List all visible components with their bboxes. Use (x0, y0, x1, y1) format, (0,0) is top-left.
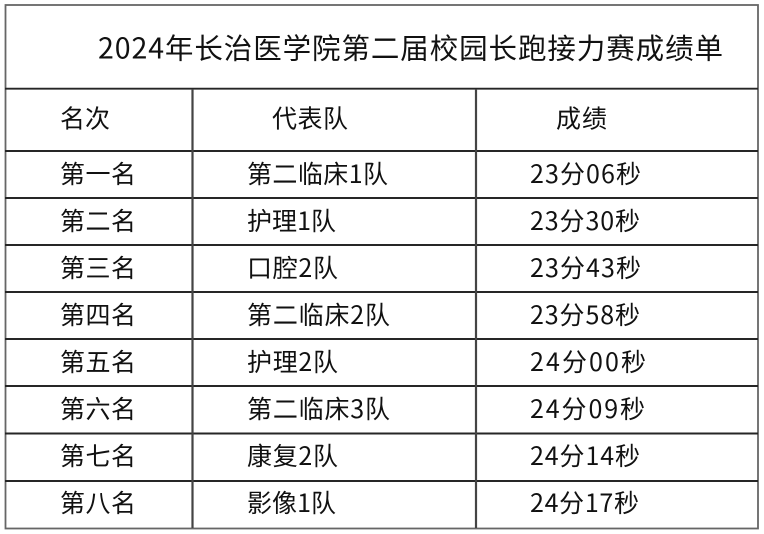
row: sixth place: 第二临床3队 (247, 390, 390, 426)
row: seventh place: 康复2队 (247, 437, 338, 473)
header row: 成绩 (556, 100, 607, 136)
row: second place: 23分30秒 (530, 202, 640, 238)
row: third place: 第三名 (60, 249, 136, 285)
row: third place: 23分43秒 (530, 249, 641, 285)
row: fourth place (60, 296, 640, 332)
row: third place: 口腔2队 (247, 249, 338, 285)
row: eighth place (60, 484, 639, 520)
row: fifth place: 24分00秒 (530, 343, 646, 379)
header row (60, 100, 607, 136)
row: sixth place: 第六名 (60, 390, 136, 426)
row: eighth place: 第八名 (60, 484, 136, 520)
row: third place (60, 249, 641, 285)
row: fifth place: 第五名 (60, 343, 136, 379)
row: first place: 第一名 (60, 155, 136, 191)
row: first place: 第二临床1队 (247, 155, 388, 191)
row: fourth place: 第二临床2队 (247, 296, 390, 332)
row: first place: 23分06秒 (530, 155, 641, 191)
header row: 名次 (60, 100, 110, 136)
row: eighth place: 24分17秒 (530, 484, 639, 520)
row: seventh place: 24分14秒 (530, 437, 640, 473)
row: seventh place (60, 437, 640, 473)
row: fourth place: 第四名 (60, 296, 136, 332)
row: sixth place (60, 390, 645, 426)
row: second place: 护理1队 (247, 202, 336, 238)
title: 2024年长治医学院第二届校园长跑接力赛成绩单 (98, 26, 723, 68)
row: sixth place: 24分09秒 (530, 390, 645, 426)
row: fifth place: 护理2队 (247, 343, 338, 379)
row: fifth place (60, 343, 646, 379)
row: second place (60, 202, 640, 238)
header row: 代表队 (272, 100, 348, 136)
row: second place: 第二名 (60, 202, 136, 238)
row: fourth place: 23分58秒 (530, 296, 640, 332)
row: first place (60, 155, 641, 191)
row: seventh place: 第七名 (60, 437, 136, 473)
row: eighth place: 影像1队 (247, 484, 336, 520)
